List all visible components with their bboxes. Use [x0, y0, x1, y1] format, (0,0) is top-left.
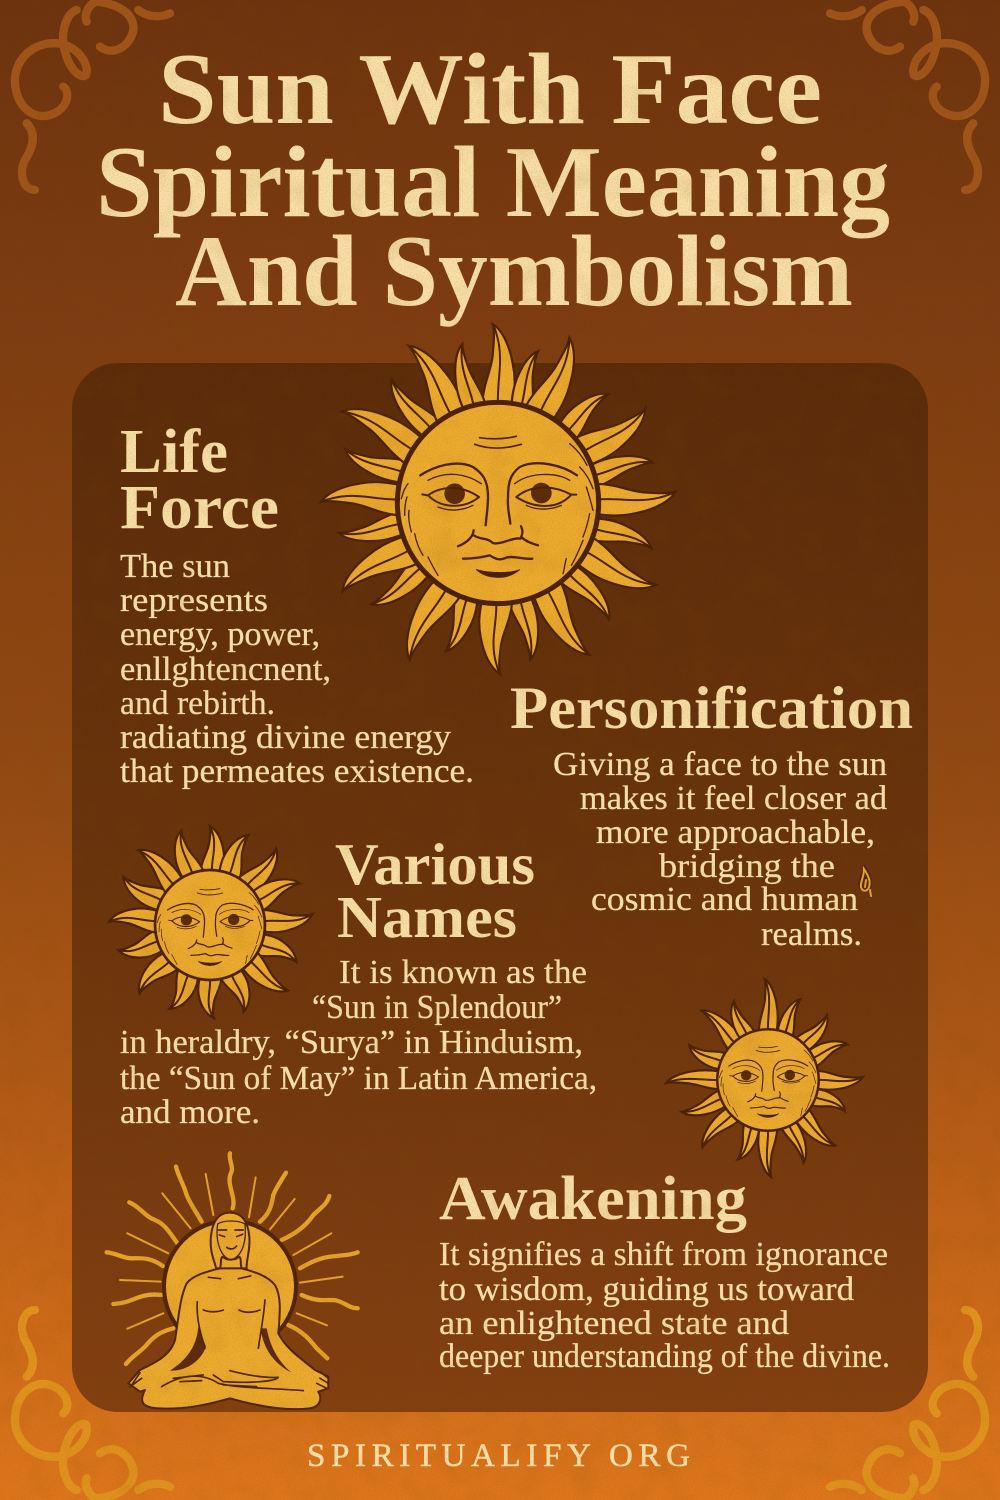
title	[96, 33, 890, 328]
heading: Life Force: Life	[120, 418, 228, 486]
text: Personification description: Giving a face to the sun	[553, 746, 887, 783]
ornament: top right corner scroll	[830, 2, 985, 190]
text: Awakening description	[439, 1236, 890, 1375]
icon: medium sun with face	[108, 826, 314, 1018]
text: Various Names description: and more.	[120, 1094, 260, 1131]
text: Life Force description	[120, 548, 474, 790]
heading: Various Names: Various	[335, 831, 535, 897]
text: Awakening description: It signifies a shift from ignorance	[439, 1236, 888, 1273]
text: Awakening description: to wisdom, guiding us toward	[439, 1271, 854, 1308]
heading: Awakening: Awakening	[439, 1165, 747, 1233]
text: Personification description: bridging the	[659, 848, 835, 885]
heading: Various Names: Names	[337, 884, 517, 950]
text: Life Force description: enllghtencnent,	[120, 651, 331, 688]
text: Various Names description: “Sun in Splendour”	[312, 989, 562, 1026]
panel: dark content card	[72, 363, 928, 1412]
text: Life Force description: energy, power,	[120, 616, 320, 653]
text: Personification description	[553, 746, 887, 953]
text: Life Force description: represents	[120, 582, 268, 619]
icon: meditating figure with sun halo	[107, 1153, 358, 1409]
text: Life Force description: that permeates existence.	[120, 753, 474, 790]
ornament: top left corner scroll	[15, 2, 170, 190]
heading: Personification: Personification	[510, 675, 913, 741]
ornament: bottom left corner scroll	[15, 1310, 170, 1498]
heading: Life Force: Force	[120, 474, 279, 542]
icon: small sun with face	[666, 979, 863, 1177]
title: And Symbolism	[175, 215, 853, 328]
text: Various Names description	[120, 954, 597, 1131]
icon: large sun with face	[321, 324, 676, 674]
text: Life Force description: and rebirth.	[120, 685, 275, 722]
icon: small flame mark	[859, 864, 872, 896]
heading: Various Names	[335, 831, 535, 950]
text: Various Names description: the “Sun of May” in Latin America,	[120, 1060, 597, 1097]
text: Life Force description: The sun	[120, 548, 230, 585]
title: Spiritual Meaning	[96, 126, 890, 239]
ornament: bottom right corner scroll	[830, 1310, 985, 1498]
text: Awakening description: deeper understanding of the divine.	[439, 1338, 890, 1375]
title: Sun With Face	[158, 33, 822, 146]
text: Personification description: cosmic and human	[591, 881, 858, 918]
text: Various Names description: in heraldry, “Surya” in Hinduism,	[120, 1024, 583, 1061]
footer: site name: SPIRITUALIFY ORG	[307, 1438, 690, 1474]
text: Personification description: more approachable,	[596, 814, 875, 851]
text: Life Force description: radiating divine energy	[120, 719, 451, 756]
text: Awakening description: an enlightened state and	[439, 1305, 789, 1342]
text: Personification description: realms.	[761, 916, 862, 953]
text: Personification description: makes it feel closer ad	[580, 780, 887, 817]
heading: Life Force	[120, 418, 279, 542]
text: Various Names description: It is known as the	[339, 954, 587, 991]
